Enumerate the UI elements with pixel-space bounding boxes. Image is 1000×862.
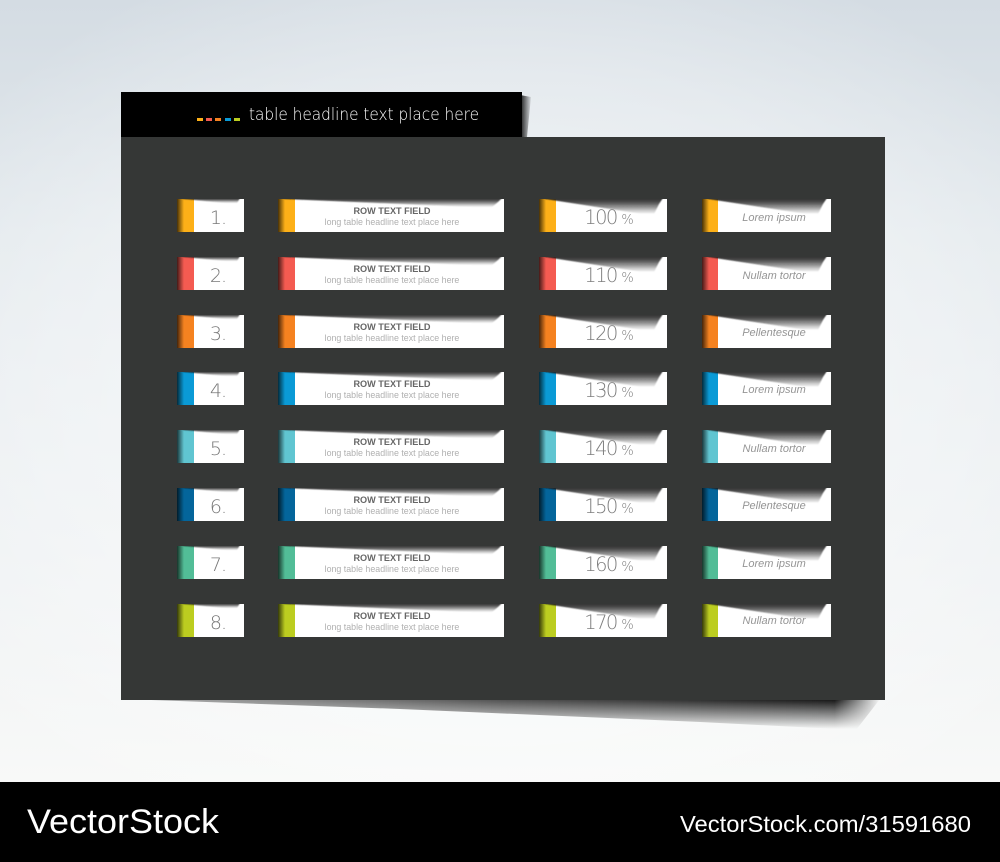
row 7: 7. [210, 554, 226, 576]
footer image id text: VectorStock.com/31591680 [680, 811, 971, 837]
row 7: long table headline text place here [325, 564, 459, 574]
footer logo text: VectorStock [27, 803, 220, 841]
row 4: Lorem ipsum [742, 384, 806, 396]
row 2 [177, 256, 831, 290]
row 5: long table headline text place here [325, 448, 459, 458]
headline tab shadow [520, 95, 531, 137]
row 7: 160 % [584, 553, 634, 576]
row 5: 140 % [584, 437, 634, 460]
row 1 [177, 198, 831, 232]
row 7: Lorem ipsum [742, 558, 806, 570]
row 2: Nullam tortor [743, 270, 807, 282]
row 3: ROW TEXT FIELD [353, 322, 431, 332]
dark table panel [121, 137, 885, 700]
row 4 [177, 371, 831, 405]
row 8: long table headline text place here [325, 622, 459, 632]
row 3: 3. [210, 323, 226, 345]
row 6: 150 % [584, 495, 634, 518]
row 3: long table headline text place here [325, 333, 459, 343]
row 7 [177, 545, 831, 579]
row 3 [177, 314, 831, 348]
headline tab [121, 92, 522, 137]
row 8: ROW TEXT FIELD [353, 611, 431, 621]
row 4: 130 % [584, 379, 634, 402]
row 6 [177, 487, 831, 521]
row 5: ROW TEXT FIELD [353, 437, 431, 447]
row 1: 1. [210, 207, 226, 229]
row 2: ROW TEXT FIELD [353, 264, 431, 274]
row 7: ROW TEXT FIELD [353, 553, 431, 563]
row 6: long table headline text place here [325, 506, 459, 516]
row 1: Lorem ipsum [742, 212, 806, 224]
row 8: Nullam tortor [743, 615, 807, 627]
row 6: Pellentesque [742, 500, 806, 512]
row 5 [177, 429, 831, 463]
row 1: long table headline text place here [325, 217, 459, 227]
row 6: 6. [210, 496, 226, 518]
footer bar [0, 782, 1000, 862]
row 4: long table headline text place here [325, 390, 459, 400]
icon: colored dashes [197, 118, 240, 121]
row 2: long table headline text place here [325, 275, 459, 285]
row 4: ROW TEXT FIELD [353, 379, 431, 389]
row 8 [177, 603, 831, 637]
headline text: table headline text place here [249, 105, 479, 125]
row 3: Pellentesque [742, 327, 806, 339]
row 3: 120 % [584, 322, 634, 345]
row 2: 110 % [584, 264, 634, 287]
row 5: 5. [210, 438, 226, 460]
panel shadow [152, 700, 878, 728]
row 6: ROW TEXT FIELD [353, 495, 431, 505]
row 5: Nullam tortor [743, 443, 807, 455]
row 1: ROW TEXT FIELD [353, 206, 431, 216]
row 8: 8. [210, 612, 226, 634]
row 2: 2. [210, 265, 226, 287]
row 4: 4. [210, 380, 226, 402]
row 1: 100 % [584, 206, 634, 229]
row 8: 170 % [584, 611, 634, 634]
